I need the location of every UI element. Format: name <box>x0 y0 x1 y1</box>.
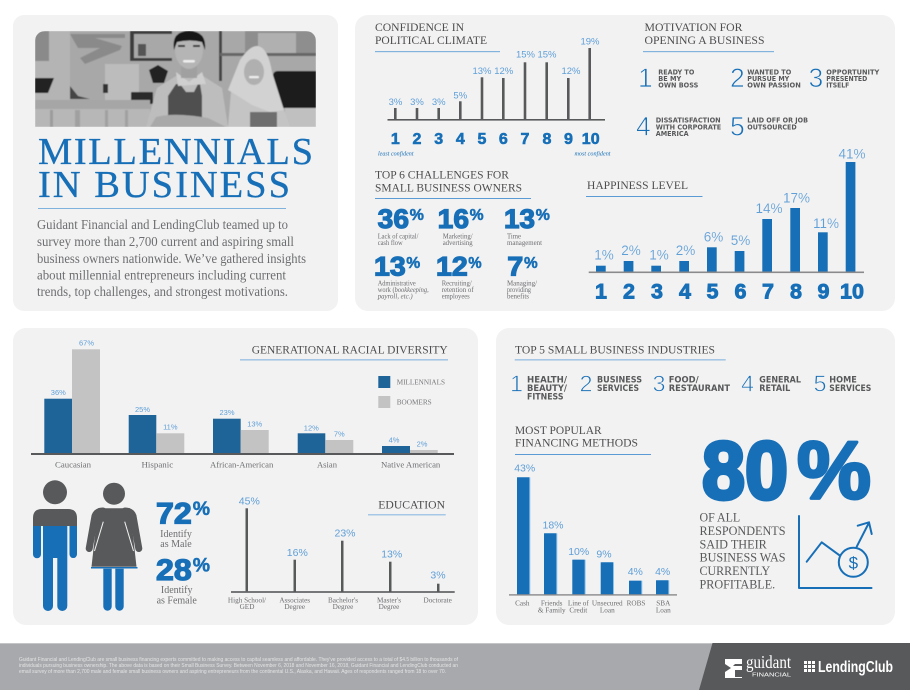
chart: education: Degree <box>333 603 353 611</box>
chart: happiness level: 2 <box>623 279 635 303</box>
stats: top 6 challenges: Managing/ <box>507 280 537 288</box>
intro text: about millennial entrepreneurs including current <box>37 268 286 282</box>
stats: top 6 challenges: 16 <box>438 204 469 234</box>
list: top 5 small business industries: GENERAL <box>759 376 801 386</box>
stats: top 6 challenges: TOP 6 CHALLENGES FOR <box>375 167 509 181</box>
list: motivation for opening a business: BE MY <box>658 75 682 83</box>
chart: happiness level: 2% <box>621 243 641 258</box>
chart: confidence in political climate <box>375 20 611 158</box>
logo: Guidant Financial: FINANCIAL <box>752 672 791 678</box>
chart: generational racial diversity: 7% <box>334 430 345 439</box>
list: motivation for opening a business: 1 <box>638 63 653 93</box>
chart: happiness level: 8 <box>790 279 802 303</box>
stats: top 6 challenges: providing <box>507 286 531 294</box>
stats: top 6 challenges: Marketing/ <box>443 233 473 241</box>
chart: most popular financing methods: 4% <box>628 566 643 578</box>
chart: confidence in political climate: 9 <box>564 131 573 148</box>
chart: most popular financing methods: Cash <box>515 599 530 607</box>
stats: top 6 challenges: % <box>410 207 424 224</box>
chart: most popular financing methods: 43% <box>514 463 535 475</box>
footer <box>0 643 910 690</box>
list: motivation for opening a business: READY TO <box>658 68 694 76</box>
footer disclaimer text: individuals pursuing business ownership. The above data is based on their Small Business Survey. Between November 6, 2018 and November 16, 2018, Guidant Financial and LendingClub conducted an <box>19 663 458 669</box>
chart: happiness level: HAPPINESS LEVEL <box>587 178 688 192</box>
list: top 5 small business industries: HEALTH/ <box>527 376 568 386</box>
footer disclaimer text: email survey of more than 2,700 male and female small business owners and aspiring entrepreneurs from the continental U.S., Alaska, and Hawaii. Ages of respondents ranged from 18 to over 70. <box>19 669 446 675</box>
intro text: business owners nationwide. We’ve gathered insights <box>37 251 306 266</box>
chart: confidence in political climate: 3 <box>434 131 443 148</box>
chart: happiness level: 1 <box>595 279 607 303</box>
chart: happiness level: 3 <box>651 279 663 303</box>
chart: generational racial diversity: 67% <box>79 339 94 348</box>
chart: education: 45% <box>239 495 260 507</box>
list: top 5 small business industries: 4 <box>741 371 754 397</box>
chart: most popular financing methods: Friends <box>541 599 563 607</box>
intro text: trends, top challenges, and strongest motivations. <box>37 284 288 299</box>
chart: generational racial diversity: Native American <box>381 459 441 469</box>
chart: most popular financing methods: ROBS <box>627 599 645 607</box>
panel: demographics <box>13 328 478 625</box>
stats: top 6 challenges: cash flow <box>378 239 403 247</box>
chart: most popular financing methods: 9% <box>596 548 612 560</box>
footer disclaimer text: Guidant Financial and LendingClub are small business financing experts committed to making access to capital seamless and affordable. They've provided access to a total of $4.5 billion to thousands of <box>19 657 459 663</box>
list: motivation for opening a business: 2 <box>730 63 745 93</box>
stats: top 6 challenges: Administrative <box>378 280 416 288</box>
list: top 5 small business industries: 3 <box>652 371 666 397</box>
list: motivation for opening a business: PRESENTED <box>826 75 867 83</box>
stats: gender: % <box>193 498 210 520</box>
chart: education: Associates <box>279 596 310 604</box>
stats: top 6 challenges: % <box>468 255 482 272</box>
list: top 5 small business industries: BEAUTY/ <box>527 384 568 394</box>
chart: confidence in political climate: least confident <box>378 150 414 158</box>
chart: education <box>228 495 455 611</box>
list: top 5 small business industries: RETAIL <box>759 384 791 394</box>
list: motivation for opening a business: OWN BOSS <box>658 82 698 90</box>
panel: introduction <box>13 15 338 311</box>
list: motivation for opening a business: DISSATISFACTION <box>656 117 721 125</box>
footer disclaimer text <box>19 657 459 675</box>
chart: happiness level: 7 <box>762 279 774 303</box>
chart: happiness level: 1% <box>594 248 614 263</box>
chart: happiness level: 6 <box>735 279 747 303</box>
chart: most popular financing methods: SBA <box>656 599 671 607</box>
chart: happiness level <box>586 146 866 303</box>
stat: 80 percent: % <box>797 426 871 517</box>
stat: 80 percent <box>700 426 871 591</box>
chart: most popular financing methods <box>509 423 677 614</box>
stat: 80 percent: SAID THEIR <box>700 537 767 551</box>
stat: 80 percent: OF ALL <box>700 511 740 525</box>
chart: confidence in political climate: 5 <box>478 131 487 148</box>
chart: happiness level: 2% <box>676 243 695 258</box>
chart: confidence in political climate: 13% <box>472 66 492 77</box>
list: top 5 small business industries <box>510 343 871 402</box>
icon: male figure <box>33 480 77 611</box>
list: motivation for opening a business: ITSELF <box>826 82 849 90</box>
stats: top 6 challenges: Time <box>507 233 521 241</box>
chart: confidence in political climate: 3% <box>432 97 446 108</box>
chart: happiness level: 4 <box>679 279 691 303</box>
chart: education: 3% <box>430 570 446 582</box>
chart: education: 16% <box>287 547 308 559</box>
stats: top 6 challenges: % <box>536 207 550 224</box>
list: motivation for opening a business: 3 <box>808 63 823 93</box>
stats: top 6 challenges: work (bookkeeping, <box>378 286 429 294</box>
chart: most popular financing methods: 18% <box>542 520 564 532</box>
stats: top 6 challenges <box>374 167 550 300</box>
stats: gender: 72 <box>156 498 192 530</box>
panel: industries and financing <box>496 328 895 625</box>
chart: confidence in political climate: POLITICAL CLIMATE <box>375 33 487 47</box>
chart: generational racial diversity: 36% <box>51 388 66 397</box>
chart: most popular financing methods: 4% <box>655 566 670 578</box>
chart: education: Degree <box>379 603 399 611</box>
list: motivation for opening a business: OPPORTUNITY <box>826 68 880 76</box>
chart: education: High School/ <box>228 596 266 604</box>
chart: generational racial diversity: 12% <box>304 424 319 433</box>
stats: top 6 challenges: payroll, etc.) <box>377 292 413 300</box>
chart: most popular financing methods: 10% <box>568 546 589 558</box>
stats: top 6 challenges: 13 <box>374 252 406 282</box>
stats: gender: Identify <box>161 585 193 596</box>
list: top 5 small business industries: BUSINESS <box>597 376 642 386</box>
stats: top 6 challenges: employees <box>442 292 470 300</box>
stats: gender: as Male <box>160 539 192 550</box>
legend: BOOMERS <box>397 397 432 406</box>
chart: confidence in political climate: most confident <box>574 150 611 158</box>
list: top 5 small business industries: SERVICES <box>597 384 639 394</box>
chart: confidence in political climate: 19% <box>580 37 600 48</box>
list: top 5 small business industries: HOME <box>829 376 857 386</box>
intro text: Guidant Financial and LendingClub teamed up to <box>37 217 288 232</box>
list: motivation for opening a business: OPENING A BUSINESS <box>644 33 764 47</box>
chart: generational racial diversity: Hispanic <box>142 459 173 469</box>
icon: female figure <box>89 483 139 611</box>
chart: confidence in political climate: 8 <box>543 131 552 148</box>
chart: confidence in political climate: 4 <box>456 131 465 148</box>
chart: most popular financing methods: Loan <box>600 606 615 614</box>
chart: generational racial diversity: Caucasian <box>55 459 92 469</box>
chart: generational racial diversity: GENERATIONAL RACIAL DIVERSITY <box>252 342 448 356</box>
list: motivation for opening a business: LAID OFF OR JOB <box>747 117 808 125</box>
legend: MILLENNIALS <box>397 377 445 386</box>
list: top 5 small business industries: 2 <box>580 371 593 397</box>
chart: education: 23% <box>334 528 356 540</box>
chart: confidence in political climate: 12% <box>494 66 514 77</box>
stats: top 6 challenges: % <box>406 255 421 272</box>
chart: generational racial diversity: 2% <box>417 439 428 448</box>
stats: top 6 challenges: % <box>470 207 484 224</box>
stat: 80 percent: CURRENTLY <box>700 564 770 578</box>
chart: happiness level: 5% <box>731 233 750 248</box>
chart: confidence in political climate: 6 <box>499 131 508 148</box>
list: top 5 small business industries: TOP 5 SMALL BUSINESS INDUSTRIES <box>515 343 715 357</box>
chart: confidence in political climate: 2 <box>413 131 422 148</box>
stats: gender: as Female <box>157 595 197 606</box>
stats: gender: 28 <box>156 554 192 587</box>
chart: happiness level: 41% <box>838 146 866 161</box>
icon: profit chart <box>799 516 872 588</box>
stats: gender <box>156 498 210 606</box>
list: motivation for opening a business: 5 <box>730 112 745 142</box>
chart: confidence in political climate: 7 <box>521 131 530 148</box>
stats: top 6 challenges: 36 <box>378 204 409 234</box>
stats: top 6 challenges: 13 <box>504 204 535 234</box>
list: motivation for opening a business: 4 <box>636 112 651 142</box>
chart: happiness level: 5 <box>707 279 719 303</box>
chart: generational racial diversity: Asian <box>317 459 338 469</box>
photo: two small business owners <box>35 31 316 127</box>
chart: happiness level: 6% <box>704 229 723 244</box>
chart: education: Doctorate <box>424 596 452 604</box>
chart: education: EDUCATION <box>378 497 445 511</box>
chart: confidence in political climate: 1 <box>391 131 400 148</box>
logo: Guidant Financial <box>725 652 791 678</box>
chart: happiness level: 1% <box>649 248 669 263</box>
title <box>38 131 313 206</box>
list: motivation for opening a business: OUTSOURCED <box>747 123 797 131</box>
stat: 80 percent: 80 <box>702 426 788 517</box>
chart: education: Bachelor's <box>328 596 358 604</box>
chart: confidence in political climate: 3% <box>410 97 424 108</box>
chart: education: Degree <box>284 603 305 611</box>
list: motivation for opening a business: PURSUE MY <box>747 75 790 83</box>
list: motivation for opening a business: OWN PASSION <box>747 82 801 90</box>
panel: top right <box>355 15 895 311</box>
list: top 5 small business industries: 5 <box>814 371 827 397</box>
chart: generational racial diversity <box>31 339 454 469</box>
chart: confidence in political climate: 3% <box>389 97 403 108</box>
chart: confidence in political climate: 12% <box>561 66 581 77</box>
chart: happiness level: 11% <box>813 216 839 231</box>
chart: most popular financing methods: Credit <box>569 606 587 614</box>
chart: generational racial diversity: 23% <box>219 408 235 417</box>
chart: most popular financing methods: Loan <box>656 606 671 614</box>
stats: top 6 challenges: retention of <box>442 286 474 294</box>
stats: top 6 challenges: % <box>524 255 538 272</box>
chart: education: 13% <box>381 548 402 560</box>
stat: 80 percent: PROFITABLE. <box>700 577 775 591</box>
list: top 5 small business industries: FITNESS <box>527 392 564 402</box>
legend <box>378 376 445 408</box>
chart: most popular financing methods: & Family <box>538 606 566 614</box>
chart: generational racial diversity: African-American <box>210 459 274 469</box>
title: IN BUSINESS <box>38 164 290 206</box>
list: motivation for opening a business: MOTIVATION FOR <box>644 20 742 34</box>
chart: most popular financing methods: Line of <box>568 599 589 607</box>
chart: confidence in political climate: 10 <box>582 131 600 148</box>
list: top 5 small business industries: 1 <box>510 371 523 397</box>
stats: top 6 challenges: advertising <box>443 239 473 247</box>
title: MILLENNIALS <box>38 131 313 173</box>
chart: most popular financing methods: Unsecured <box>592 599 623 607</box>
chart: happiness level: 17% <box>783 190 810 205</box>
logo: Guidant Financial: guidant <box>746 652 791 672</box>
chart: education: Master's <box>377 596 401 604</box>
chart: generational racial diversity: 11% <box>163 423 178 432</box>
chart: most popular financing methods: MOST POPULAR <box>515 423 602 437</box>
stats: top 6 challenges: benefits <box>507 292 529 300</box>
intro text: survey more than 2,700 current and aspiring small <box>37 234 294 249</box>
stats: top 6 challenges: SMALL BUSINESS OWNERS <box>375 180 522 194</box>
list: top 5 small business industries: SERVICES <box>829 384 871 394</box>
list: motivation for opening a business: WANTED TO <box>747 68 791 76</box>
list: motivation for opening a business <box>636 20 880 142</box>
list: top 5 small business industries: RESTAURANT <box>669 384 730 394</box>
chart: generational racial diversity: 13% <box>247 419 263 428</box>
chart: confidence in political climate: 5% <box>453 90 468 102</box>
stat: 80 percent: RESPONDENTS <box>700 524 786 538</box>
chart: confidence in political climate: CONFIDENCE IN <box>375 20 464 34</box>
list: motivation for opening a business: WITH CORPORATE <box>656 123 721 131</box>
chart: happiness level: 10 <box>840 279 864 303</box>
list: motivation for opening a business: AMERICA <box>656 130 689 138</box>
stats: top 6 challenges: Lack of capital/ <box>378 233 418 241</box>
intro text <box>37 217 306 299</box>
chart: most popular financing methods: FINANCING METHODS <box>515 436 638 450</box>
chart: generational racial diversity: 4% <box>389 436 400 445</box>
icon: profit chart: $ <box>849 554 859 572</box>
stats: top 6 challenges: 7 <box>507 252 523 282</box>
chart: confidence in political climate: 15% <box>537 50 557 61</box>
chart: happiness level: 14% <box>755 201 783 216</box>
stats: gender: Identify <box>160 529 192 540</box>
stats: top 6 challenges: management <box>507 239 542 247</box>
stat: 80 percent: BUSINESS WAS <box>700 551 786 565</box>
chart: confidence in political climate: 15% <box>516 50 536 61</box>
chart: happiness level: 9 <box>818 279 830 303</box>
list: top 5 small business industries: FOOD/ <box>669 376 699 386</box>
stats: gender: % <box>193 554 210 576</box>
stats: top 6 challenges: 12 <box>436 252 468 282</box>
stats: top 6 challenges: Recruiting/ <box>442 280 472 288</box>
chart: education: GED <box>240 603 254 611</box>
chart: generational racial diversity: 25% <box>135 405 150 414</box>
